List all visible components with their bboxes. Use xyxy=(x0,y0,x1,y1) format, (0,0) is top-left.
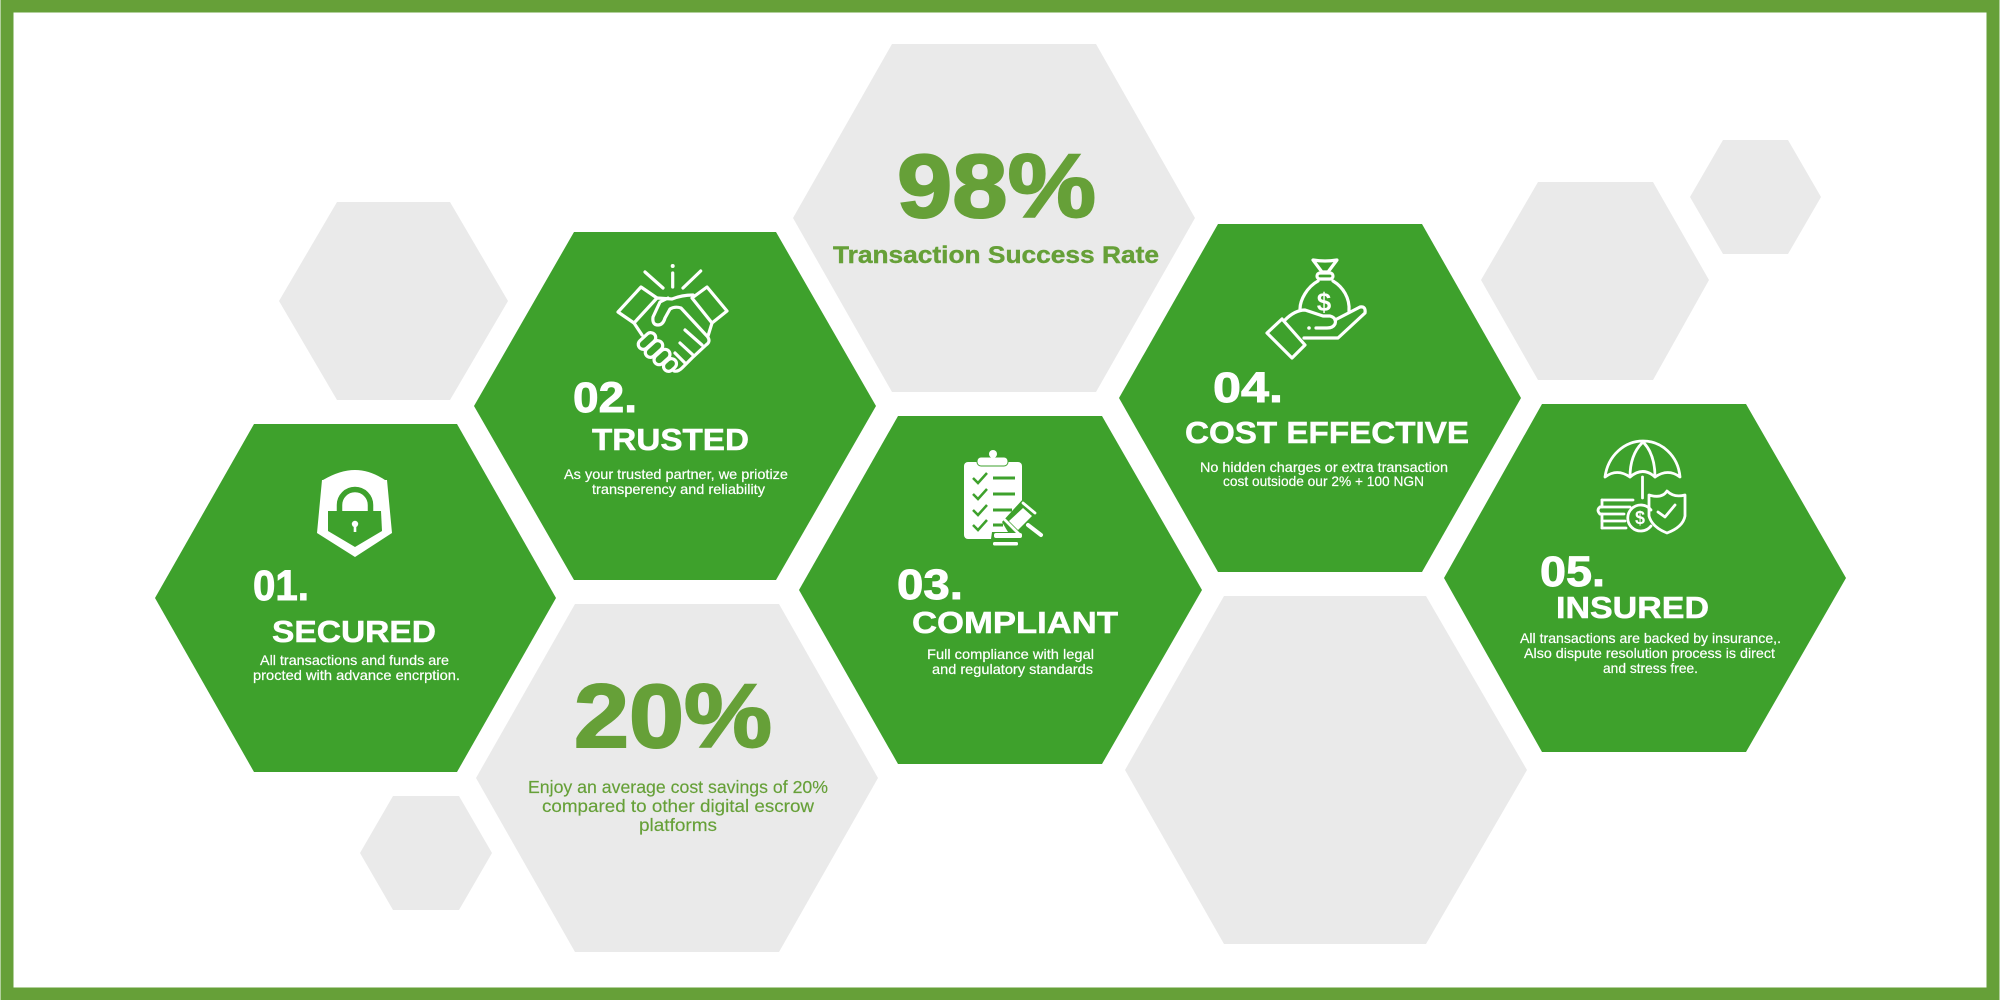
icon: shield lock xyxy=(317,470,392,557)
icon: hand holding money bag xyxy=(1267,260,1365,358)
number: 05. xyxy=(1540,548,1605,596)
description: Full compliance with legal xyxy=(927,646,1094,662)
panel: 04 cost effective xyxy=(1119,224,1521,572)
stat: 20%: 20% xyxy=(574,667,772,767)
description: procted with advance encrption. xyxy=(253,667,460,683)
description xyxy=(1200,459,1448,489)
panel: 98% success rate xyxy=(793,44,1195,392)
panel: 03 compliant xyxy=(799,416,1202,764)
icon: umbrella, coins and shield xyxy=(1598,441,1685,533)
description: cost outsiode our 2% + 100 NGN xyxy=(1223,473,1424,489)
description xyxy=(564,466,788,497)
decorative grey hexagon: top right small xyxy=(1690,140,1821,254)
icon: umbrella, coins and shield: $ xyxy=(1635,508,1645,528)
panel: 05 insured xyxy=(1444,404,1846,752)
stat description xyxy=(528,777,828,835)
number: 01. xyxy=(253,562,309,610)
decorative grey hexagon: bottom left small xyxy=(360,796,492,910)
panel: 20% cost savings xyxy=(476,604,878,952)
description: All transactions and funds are xyxy=(260,652,449,668)
description: All transactions are backed by insurance,. xyxy=(1520,630,1781,646)
description xyxy=(253,652,460,683)
stat description: compared to other digital escrow xyxy=(542,796,814,816)
description: Also dispute resolution process is direct xyxy=(1524,645,1775,661)
description xyxy=(927,646,1094,677)
number: 02. xyxy=(573,374,637,422)
stat label: Transaction Success Rate xyxy=(833,242,1159,269)
description: and stress free. xyxy=(1603,660,1698,676)
icon: clipboard with gavel xyxy=(964,450,1046,546)
description: transperency and reliability xyxy=(592,481,765,497)
number: 04. xyxy=(1213,364,1283,412)
panel: 01 secured xyxy=(155,424,556,772)
heading: COMPLIANT xyxy=(912,605,1118,640)
icon: hand holding money bag: $ xyxy=(1317,287,1332,317)
description: As your trusted partner, we priotize xyxy=(564,466,788,482)
panel: 02 trusted xyxy=(474,232,876,580)
heading: COST EFFECTIVE xyxy=(1185,415,1469,450)
stat: 98%: 98% xyxy=(897,137,1096,237)
icon: handshake xyxy=(618,264,727,373)
decorative grey hexagon: top left xyxy=(279,202,508,400)
heading: INSURED xyxy=(1556,590,1709,625)
decorative grey hexagon: lower right large xyxy=(1125,596,1527,944)
heading: SECURED xyxy=(272,614,436,649)
decorative grey hexagon: right medium xyxy=(1481,182,1709,380)
description: and regulatory standards xyxy=(932,661,1093,677)
description xyxy=(1520,630,1781,676)
stat description: Enjoy an average cost savings of 20% xyxy=(528,777,828,797)
heading: TRUSTED xyxy=(592,422,749,457)
description: No hidden charges or extra transaction xyxy=(1200,459,1448,475)
stat description: platforms xyxy=(639,815,717,835)
number: 03. xyxy=(897,561,963,609)
